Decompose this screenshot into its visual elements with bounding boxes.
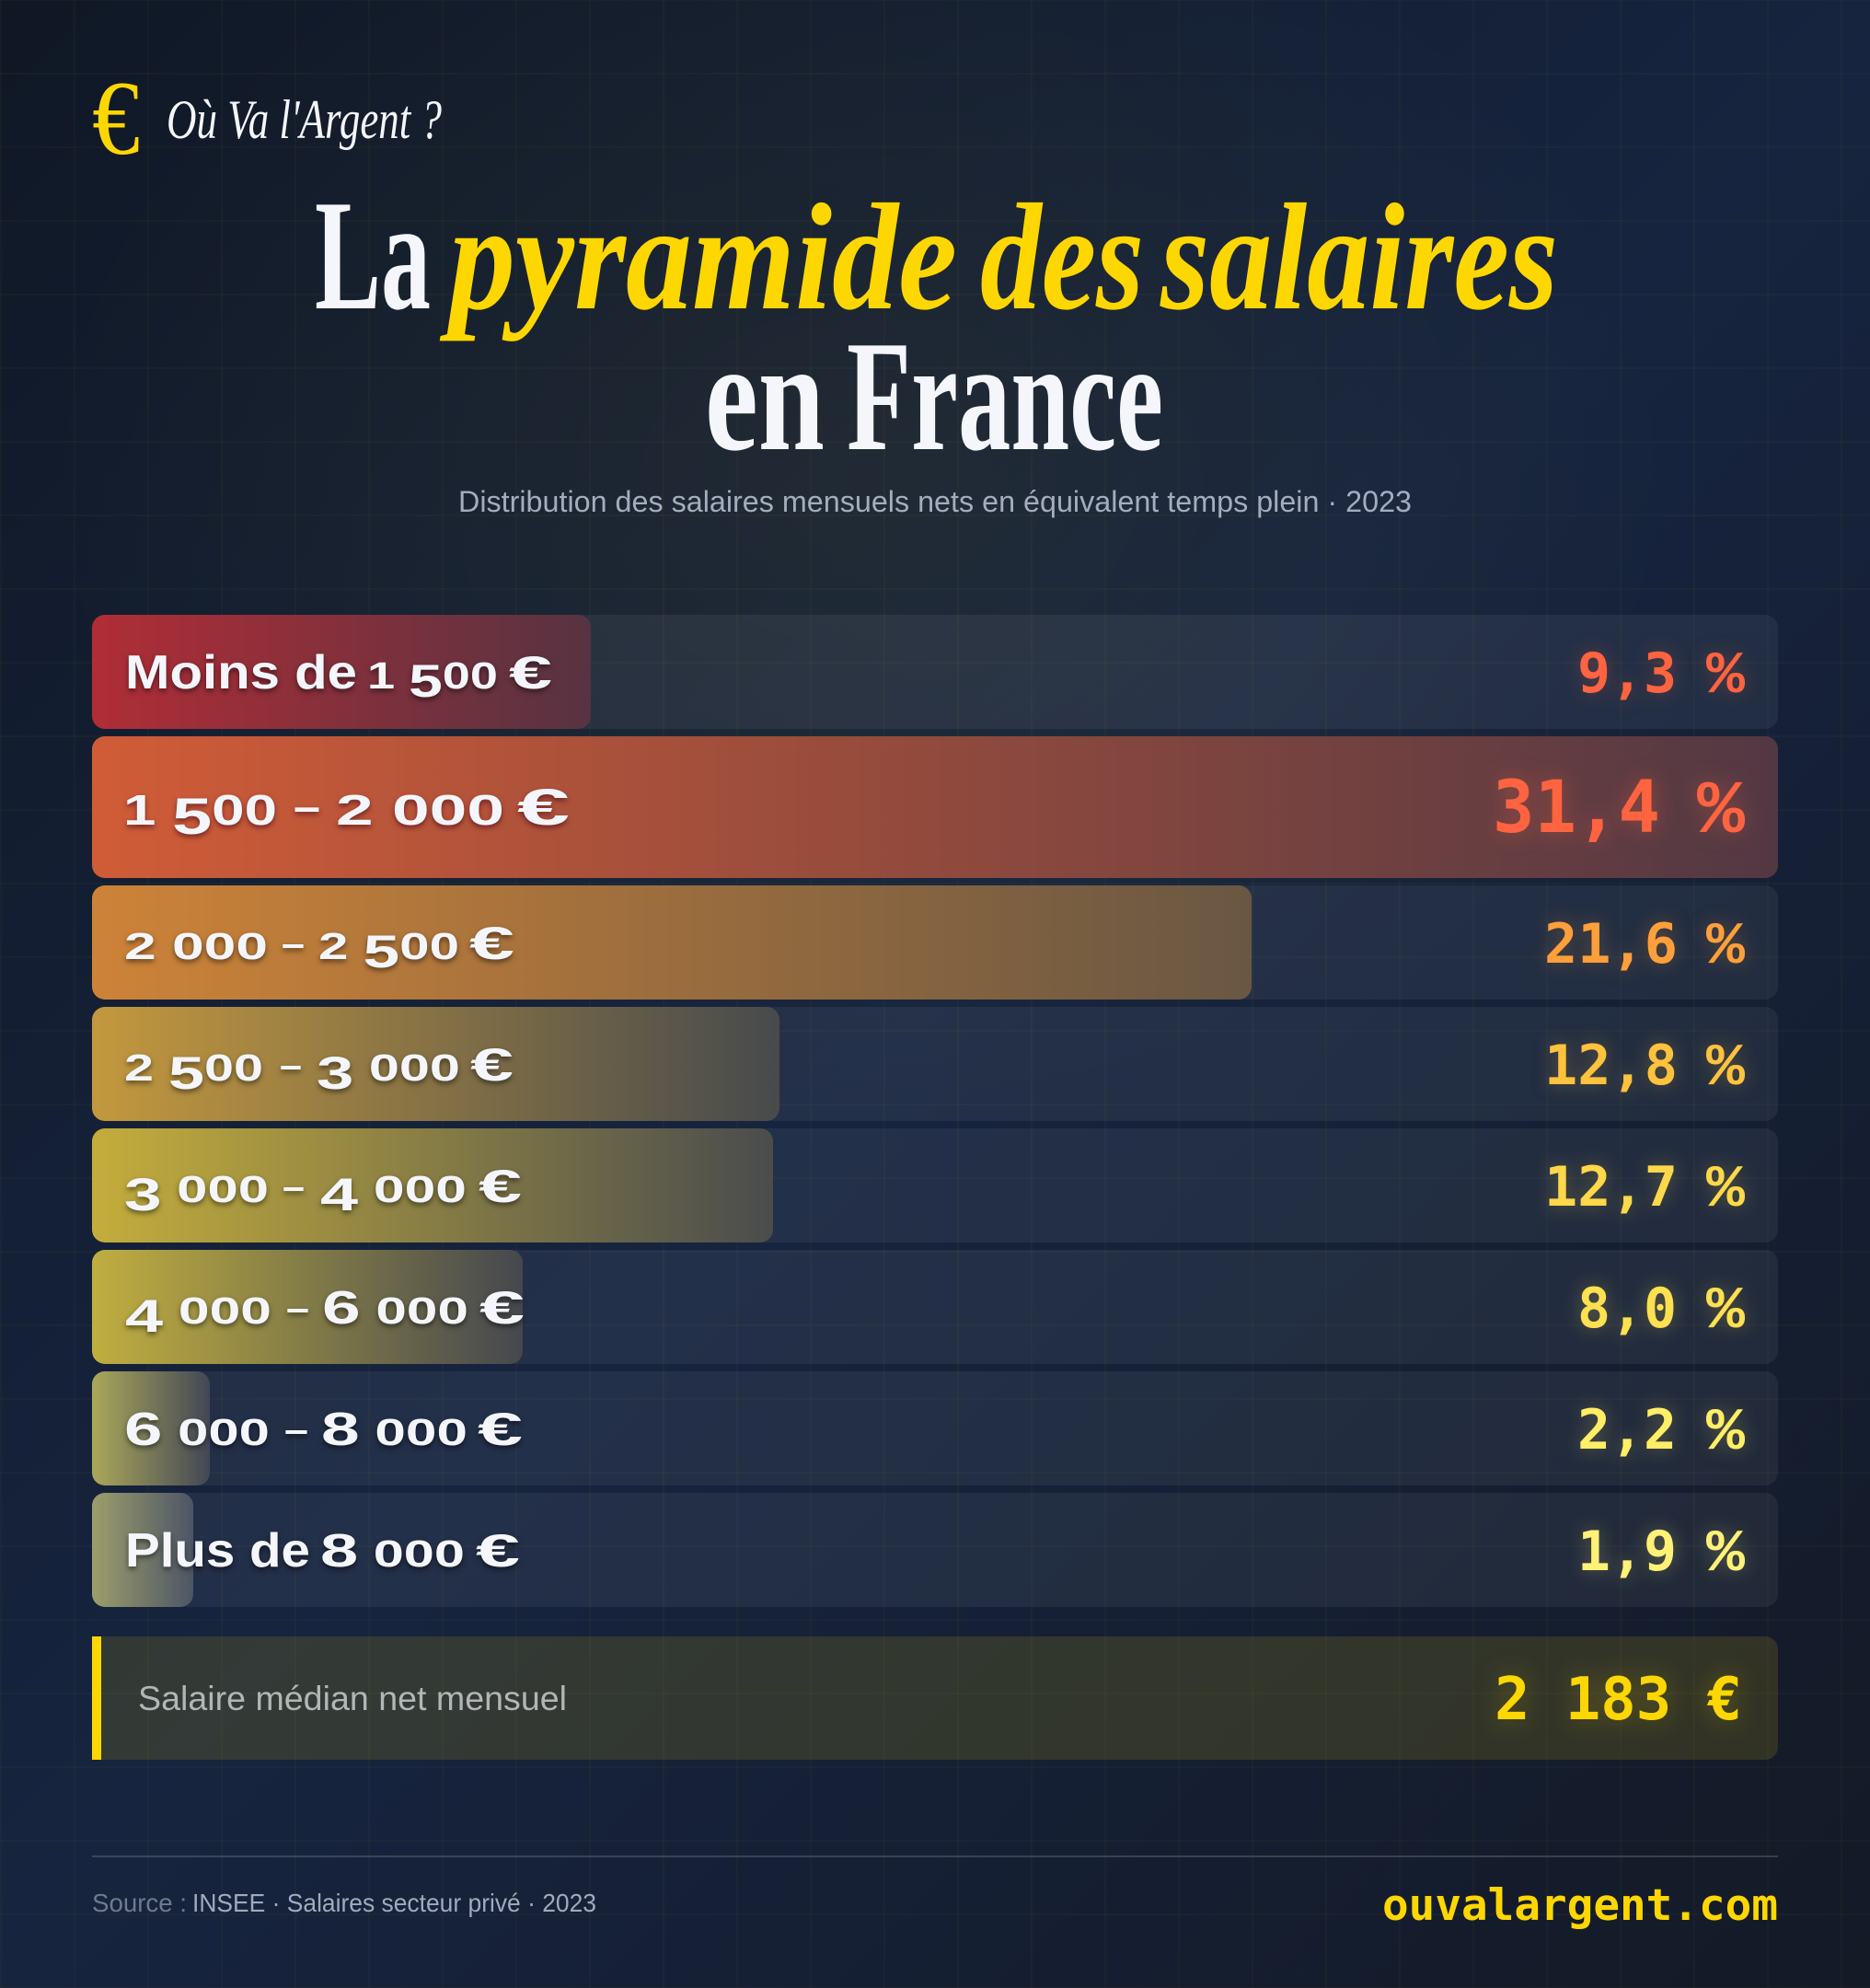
row: 2 500 - 3 000 euros: % [1706,1034,1746,1103]
row: 4 000 - 6 000 euros: 000 [163,1289,271,1332]
row: 3 000 - 4 000 euros: 3 [124,1169,162,1220]
title: pyramide [440,172,957,341]
row: moins de 1 500 euros: Moins de [125,646,357,699]
row: 3 000 - 4 000 euros: 12,7 [1544,1155,1678,1219]
row: 6 000 - 8 000 euros: 2,2 [1577,1398,1677,1462]
row: 1 500 - 2 000 euros: 1 [123,786,147,834]
row: 1 500 - 2 000 euros: 00 [212,786,277,834]
brand header [92,60,442,178]
row: moins de 1 500 euros: 5 [409,655,443,707]
row: plus de 8 000 euros: 8 000 [320,1524,465,1577]
row: moins de 1 500 euros [92,615,1778,729]
row: 2 000 - 2 500 euros: 2 [318,925,340,967]
icon: euro sign: € [92,60,140,178]
row: 2 500 - 3 000 euros: 000 [353,1046,460,1089]
row: 2 500 - 3 000 euros: 3 [317,1047,353,1099]
callout: median salary [92,1636,1778,1760]
row: plus de 8 000 euros [92,1493,1778,1607]
row: plus de 8 000 euros: Plus de [125,1524,310,1578]
row: 2 000 - 2 500 euros: 00 [399,925,459,967]
row: 2 000 - 2 500 euros: 2 000 [124,925,268,967]
row: 1 500 - 2 000 euros: % [1697,769,1746,855]
row: 4 000 - 6 000 euros: € [479,1282,525,1334]
title: salaires [1160,172,1558,341]
footer: website: ouvalargent.com [1382,1880,1778,1931]
title: La [315,168,431,343]
row: 3 000 - 4 000 euros: 000 [358,1168,467,1210]
row: 6 000 - 8 000 euros: 6 000 [124,1403,270,1455]
row: 1 500 - 2 000 euros: € [517,778,570,836]
row: 2 000 - 2 500 euros [92,885,1778,1000]
row: 4 000 - 6 000 euros [92,1250,1778,1364]
row: 1 500 - 2 000 euros: – [294,782,320,830]
row: plus de 8 000 euros: € [476,1525,520,1577]
title [315,168,1558,484]
row: moins de 1 500 euros: € [509,647,552,699]
row: 3 000 - 4 000 euros: – [283,1165,305,1208]
row: moins de 1 500 euros: 00 [443,654,498,697]
callout: median salary: Salaire médian net mensuel [138,1680,567,1717]
row: moins de 1 500 euros: 1 [367,654,388,697]
row: 2 000 - 2 500 euros: % [1706,913,1746,981]
row: 2 500 - 3 000 euros: € [470,1039,514,1091]
row: 2 000 - 2 500 euros: 21,6 [1544,912,1678,977]
footer: source: Source : [92,1889,187,1917]
row: 3 000 - 4 000 euros: 000 [162,1168,269,1210]
row: 6 000 - 8 000 euros [92,1371,1778,1485]
row: 6 000 - 8 000 euros: € [478,1404,523,1455]
row: 2 500 - 3 000 euros: 5 [168,1047,204,1099]
row: 3 000 - 4 000 euros: € [479,1161,522,1212]
row: plus de 8 000 euros: % [1706,1520,1746,1589]
footer: source: INSEE · Salaires secteur privé · 2023 [192,1889,596,1917]
row: 4 000 - 6 000 euros: % [1706,1277,1746,1346]
row: 2 500 - 3 000 euros: – [280,1044,302,1086]
title: France [847,309,1163,484]
row: 2 000 - 2 500 euros: € [469,918,514,969]
brand name: Où Va l'Argent ? [167,89,442,150]
row: 6 000 - 8 000 euros: – [284,1408,308,1451]
row: 2 500 - 3 000 euros: 12,8 [1544,1034,1678,1098]
subtitle: Distribution des salaires mensuels nets en équivalent temps plein · 2023 [458,485,1412,518]
row: 6 000 - 8 000 euros: 8 000 [321,1403,468,1455]
row: 4 000 - 6 000 euros: 6 000 [322,1281,468,1334]
row: 1 500 - 2 000 euros: 31,4 [1493,767,1660,850]
row: moins de 1 500 euros: 9,3 [1577,641,1677,706]
row: 1 500 - 2 000 euros [92,736,1778,878]
callout: median salary: 2 183 € [1495,1666,1742,1734]
row: 1 500 - 2 000 euros: 5 [172,787,212,845]
row: 3 000 - 4 000 euros: % [1706,1156,1746,1224]
title: des [980,172,1144,341]
row: 2 000 - 2 500 euros: – [282,922,305,965]
row: 2 000 - 2 500 euros: 5 [364,926,399,977]
title: en [705,309,825,484]
row: 3 000 - 4 000 euros: 4 [320,1169,358,1220]
row: 4 000 - 6 000 euros: – [286,1287,309,1329]
row: plus de 8 000 euros: 1,9 [1577,1520,1677,1584]
row: 1 500 - 2 000 euros: 2 000 [336,786,504,834]
row: moins de 1 500 euros: % [1706,642,1746,711]
row: 2 500 - 3 000 euros [92,1007,1778,1121]
row: 4 000 - 6 000 euros: 8,0 [1577,1277,1677,1341]
row: 3 000 - 4 000 euros [92,1128,1778,1242]
row: 2 500 - 3 000 euros: 00 [204,1046,263,1089]
row: 2 500 - 3 000 euros: 2 [124,1046,145,1089]
row: 4 000 - 6 000 euros: 4 [125,1290,163,1342]
row: 6 000 - 8 000 euros: % [1706,1399,1746,1467]
